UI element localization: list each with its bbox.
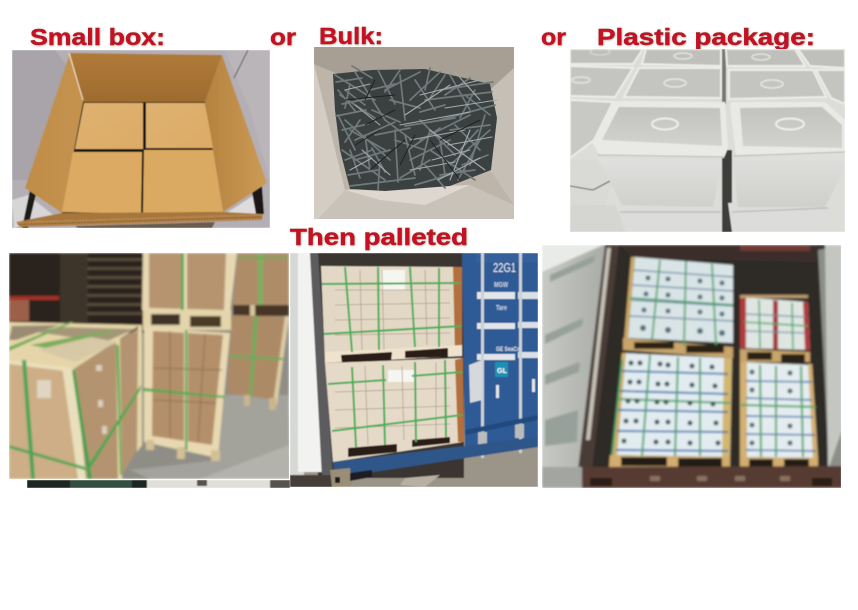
photo: pallets loaded in blue container: MGW: [494, 282, 508, 289]
lower pallet: [325, 358, 463, 462]
crate D: [740, 362, 817, 458]
heading: Then palleted: Then palleted: [290, 224, 468, 250]
photo: printed carton pallets in shipping container: [542, 245, 842, 488]
blue door: [462, 253, 538, 450]
front large crate: [72, 327, 141, 479]
heading: Small box: Small box:: [30, 24, 165, 50]
open door on the left: [290, 253, 304, 478]
heading: or (second): or: [541, 24, 566, 50]
top row tub lids: [570, 49, 845, 158]
container floor beam: [580, 466, 842, 488]
photo: pallets loaded in blue container: GL: [497, 368, 508, 375]
left door: [542, 245, 604, 273]
heading: or (first): or: [270, 24, 296, 50]
heading: Plastic package: Plastic package:: [597, 24, 815, 50]
stacked crate lower: [144, 328, 230, 458]
upper pallet: [321, 266, 462, 362]
dark strip below warehouse photo: [27, 480, 290, 488]
back right crates: [233, 253, 289, 307]
photo: open carton with four small boxes: [12, 50, 270, 228]
blue sill: [332, 437, 538, 474]
photo: pallets loaded in blue container: Tare: [496, 305, 507, 312]
stacked crate upper: [142, 253, 237, 312]
photo: bulk screws in carton: [314, 47, 514, 219]
crate C: [740, 297, 810, 350]
photo: pallets loaded in blue container: GE SeaCo: [496, 347, 520, 353]
heading: Bulk: Bulk:: [319, 23, 383, 49]
photo: pallets loaded in blue container: 22G1: [493, 260, 516, 275]
right door: [818, 245, 842, 487]
front right tub: [727, 202, 733, 231]
crate B: [612, 353, 732, 457]
photo: pallets loaded in blue container: [290, 253, 538, 487]
crate A: [628, 257, 733, 343]
front left tub: [624, 224, 641, 232]
photo: white plastic tubs: [570, 49, 845, 232]
photo: wooden-frame crates in warehouse: [9, 253, 290, 479]
